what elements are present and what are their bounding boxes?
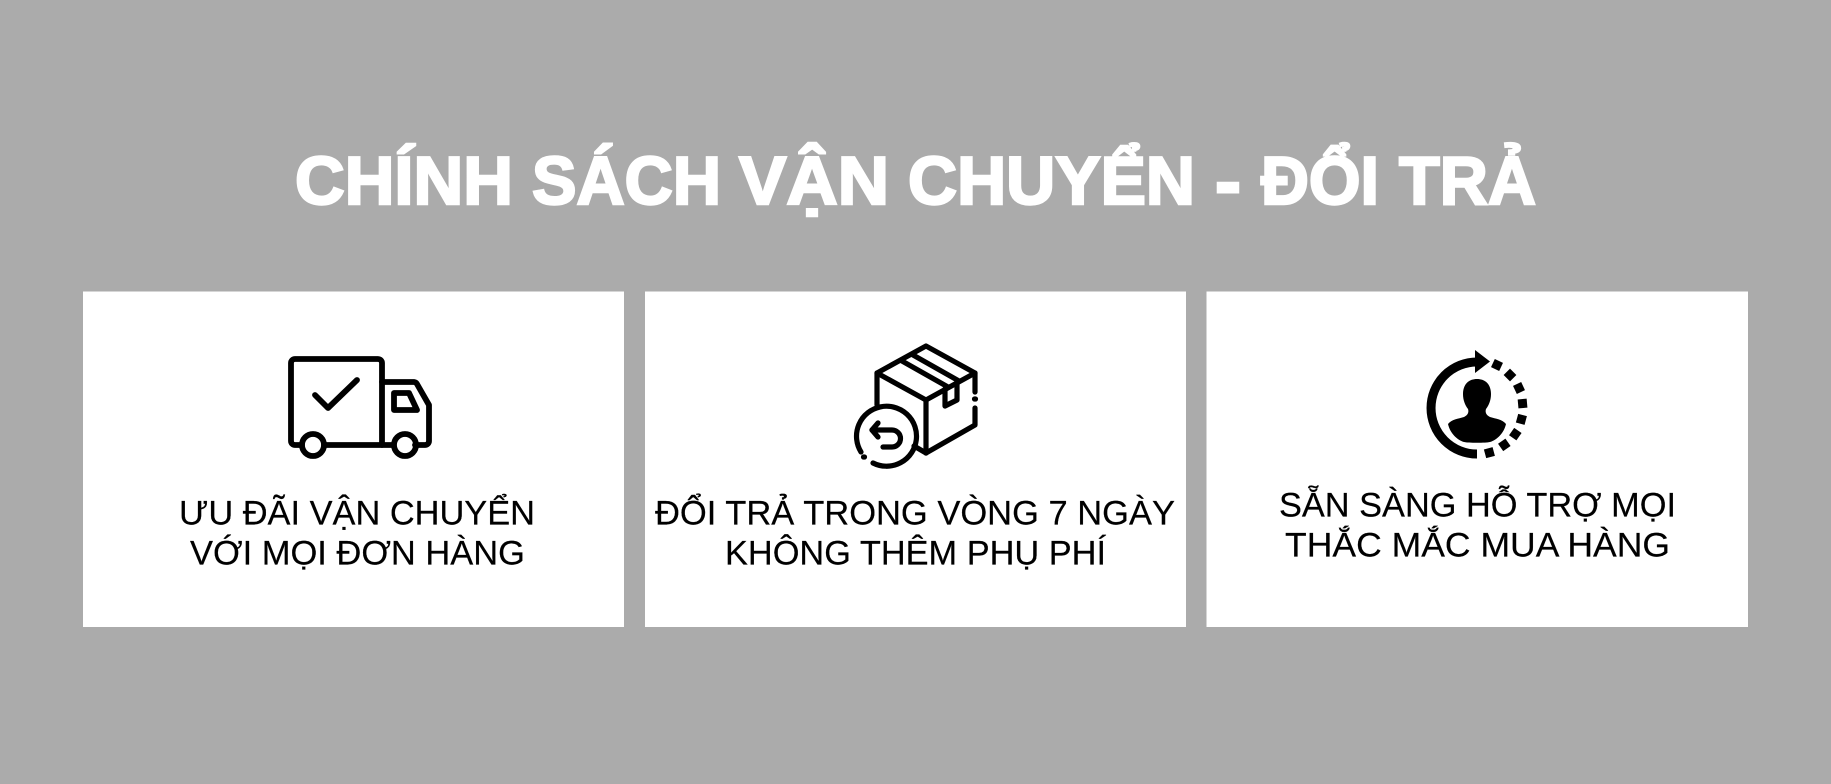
- text: support message: SẴN SÀNG HỖ TRỢ MỌI: [1279, 486, 1676, 524]
- text: return policy: ĐỔI TRẢ TRONG VÒNG 7 NGÀY: [655, 494, 1175, 532]
- panel: returns: [645, 292, 1186, 627]
- text: shipping offer: ƯU ĐÃI VẬN CHUYỂN: [179, 494, 535, 532]
- title: VẬN: [739, 142, 889, 219]
- panel: shipping: [83, 292, 624, 627]
- icon: return box: [857, 346, 976, 466]
- text: support message: [1279, 486, 1676, 564]
- title: SÁCH: [532, 143, 721, 219]
- title: CHUYỂN: [908, 142, 1195, 219]
- icon: customer support cycle: [1431, 350, 1527, 458]
- text: return policy: KHÔNG THÊM PHỤ PHÍ: [725, 534, 1107, 572]
- title: [295, 142, 1536, 221]
- text: return policy: [655, 494, 1175, 572]
- text: shipping offer: VỚI MỌI ĐƠN HÀNG: [190, 534, 525, 572]
- icon: delivery truck: [291, 359, 429, 456]
- title: ĐỔI: [1261, 142, 1379, 219]
- title: CHÍNH: [295, 143, 513, 219]
- panel: support: [1206, 292, 1748, 627]
- text: support message: THẮC MẮC MUA HÀNG: [1285, 526, 1670, 564]
- title: –: [1217, 145, 1239, 221]
- text: shipping offer: [179, 494, 535, 572]
- title: TRẢ: [1399, 142, 1536, 219]
